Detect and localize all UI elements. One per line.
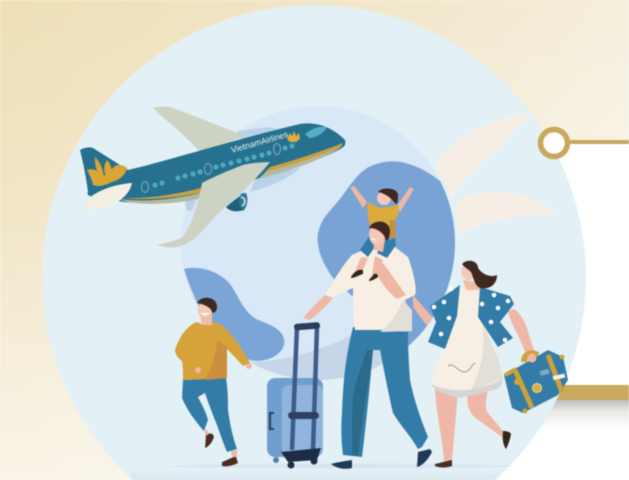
boy shirt: [175, 322, 250, 380]
child top shade: [388, 220, 396, 238]
mother shoes: [435, 460, 452, 468]
child arms: [350, 186, 367, 208]
bag handle: [524, 353, 538, 362]
cockpit window: [305, 127, 327, 138]
cross bar: [288, 412, 319, 419]
mother head and hair: [463, 280, 480, 290]
jacket right panel: [478, 287, 514, 347]
father neck: [374, 240, 385, 252]
globe: [182, 106, 456, 380]
lower wing: [157, 162, 270, 248]
person: father carrying child: [303, 186, 433, 469]
land: left continent: [184, 268, 284, 361]
upper wing: [153, 107, 245, 152]
belly stripe: [122, 186, 208, 199]
windows: [152, 143, 295, 188]
decorative palm leaves: [436, 112, 559, 235]
father trouser shade: [352, 350, 373, 456]
father forearm: [303, 295, 333, 320]
child head: [377, 191, 391, 205]
case body: [267, 378, 323, 457]
airline logo: [287, 131, 300, 142]
boy feet: [205, 429, 209, 438]
father head: [369, 225, 385, 245]
panel: white card with gold borders: [540, 140, 629, 400]
airline name: VietnamAirlines: [230, 129, 289, 155]
base and wheels: [281, 448, 321, 462]
telescopic handle: [292, 326, 317, 450]
mother arm: [508, 309, 536, 361]
plane: [80, 107, 345, 248]
engine: [226, 193, 247, 211]
father arm to child: [375, 263, 406, 299]
dress squiggle: [448, 363, 475, 372]
tail logo: [87, 157, 127, 186]
globe shadow crescent: [252, 336, 382, 380]
bag badge: [532, 384, 542, 392]
father trousers: [341, 327, 428, 457]
connector ring: [540, 130, 568, 156]
boy head: [199, 312, 212, 325]
mother legs: [435, 388, 458, 461]
child shoes: [351, 270, 363, 278]
boy legs: [182, 378, 237, 452]
father shoes: [331, 460, 352, 469]
belly underside: [118, 192, 205, 204]
jacket dots: [432, 287, 510, 342]
person: boy: [175, 298, 252, 466]
ground shadow: [130, 464, 512, 480]
far arm of mother: [413, 295, 433, 326]
bag corners: [514, 379, 520, 385]
jacket left panel: [428, 285, 460, 349]
child legs: [355, 257, 368, 272]
bag straps: [515, 355, 562, 408]
boy hands: [246, 363, 252, 369]
father shirt shade: [380, 300, 412, 332]
plane shadow patches: [237, 127, 290, 150]
tail stabilizer: [86, 183, 132, 211]
land: right continent: [317, 160, 456, 346]
person: mother: [428, 261, 536, 468]
father shirt: [325, 247, 416, 330]
child on shoulders: [350, 186, 414, 281]
bag body: [504, 350, 568, 413]
fuselage: [80, 123, 345, 203]
doors: [142, 144, 280, 192]
mother dress: [431, 285, 503, 394]
child top: [367, 202, 399, 238]
suitcase: [267, 322, 323, 468]
hand on bag: [528, 354, 536, 362]
side grip: [270, 413, 274, 429]
blue travel bag: [504, 350, 568, 414]
father smile: [371, 238, 376, 240]
